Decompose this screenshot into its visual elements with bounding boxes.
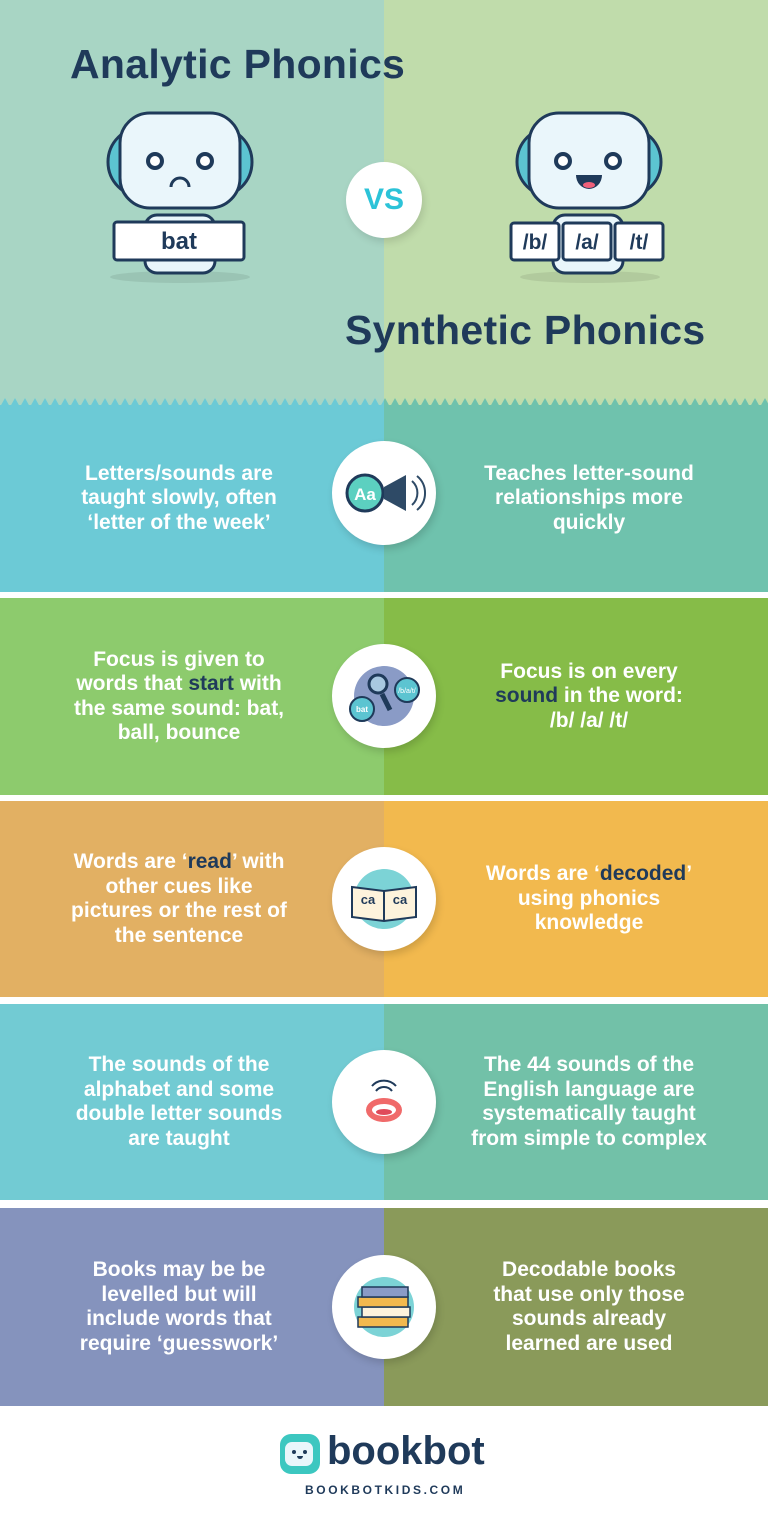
row 1 [0, 405, 768, 592]
icon: Aa speaker [332, 441, 436, 545]
row 1: Teaches letter-sound relationships more quickly [484, 462, 694, 534]
icon: book: ca [393, 892, 408, 907]
robot: happy with sounds [510, 112, 664, 283]
row 2: Focus is given to words that start with the same sound: bat, ball, bounce [74, 648, 284, 744]
header panel [0, 0, 768, 405]
row 2 [0, 598, 768, 795]
icon: book: ca [361, 892, 376, 907]
row 4 [0, 1004, 768, 1200]
row 3: Words are ‘read’ with other cues like pictures or the rest of the sentence [71, 850, 287, 946]
icon: bookbot logo [280, 1434, 320, 1474]
row 2: Focus is on every sound in the word: /b/ /a/ /t/ [495, 660, 683, 732]
robot: sad with bat: bat [161, 228, 197, 255]
row 4: The sounds of the alphabet and some double letter sounds are taught [76, 1053, 282, 1150]
row 4: The 44 sounds of the English language are systematically taught from simple to complex [471, 1053, 707, 1150]
title: synthetic: Synthetic Phonics [345, 307, 706, 353]
robot: happy with sounds: /a/ [575, 231, 599, 254]
zigzag edge [1, 398, 768, 405]
vs badge [346, 162, 422, 238]
footer logo [280, 1429, 485, 1497]
row 3 [0, 801, 768, 997]
robot: sad with bat [106, 112, 254, 283]
title: analytic: Analytic Phonics [70, 41, 405, 87]
row 1: Letters/sounds are taught slowly, often ‘letter of the week’ [81, 462, 277, 534]
icon: Aa speaker: Aa [354, 485, 376, 504]
icon: mouth [332, 1050, 436, 1154]
row 5 [0, 1208, 768, 1406]
vs badge: VS [364, 183, 404, 216]
icon: book [332, 847, 436, 951]
row 3: Words are ‘decoded’ using phonics knowledge [486, 862, 692, 934]
icon: magnifier: /b/a/t/ [398, 688, 416, 695]
icon: magnifier: bat [356, 705, 368, 714]
row 5: Decodable books that use only those sounds already learned are used [493, 1258, 685, 1354]
footer logo: bookbot [327, 1429, 485, 1473]
icon: magnifier [332, 644, 436, 748]
icon: books [332, 1255, 436, 1359]
robot: happy with sounds: /b/ [523, 231, 547, 254]
row 5: Books may be be levelled but will include words that require ‘guesswork’ [80, 1258, 278, 1354]
footer logo: BOOKBOTKIDS.COM [305, 1483, 465, 1497]
robot: happy with sounds: /t/ [630, 231, 648, 254]
